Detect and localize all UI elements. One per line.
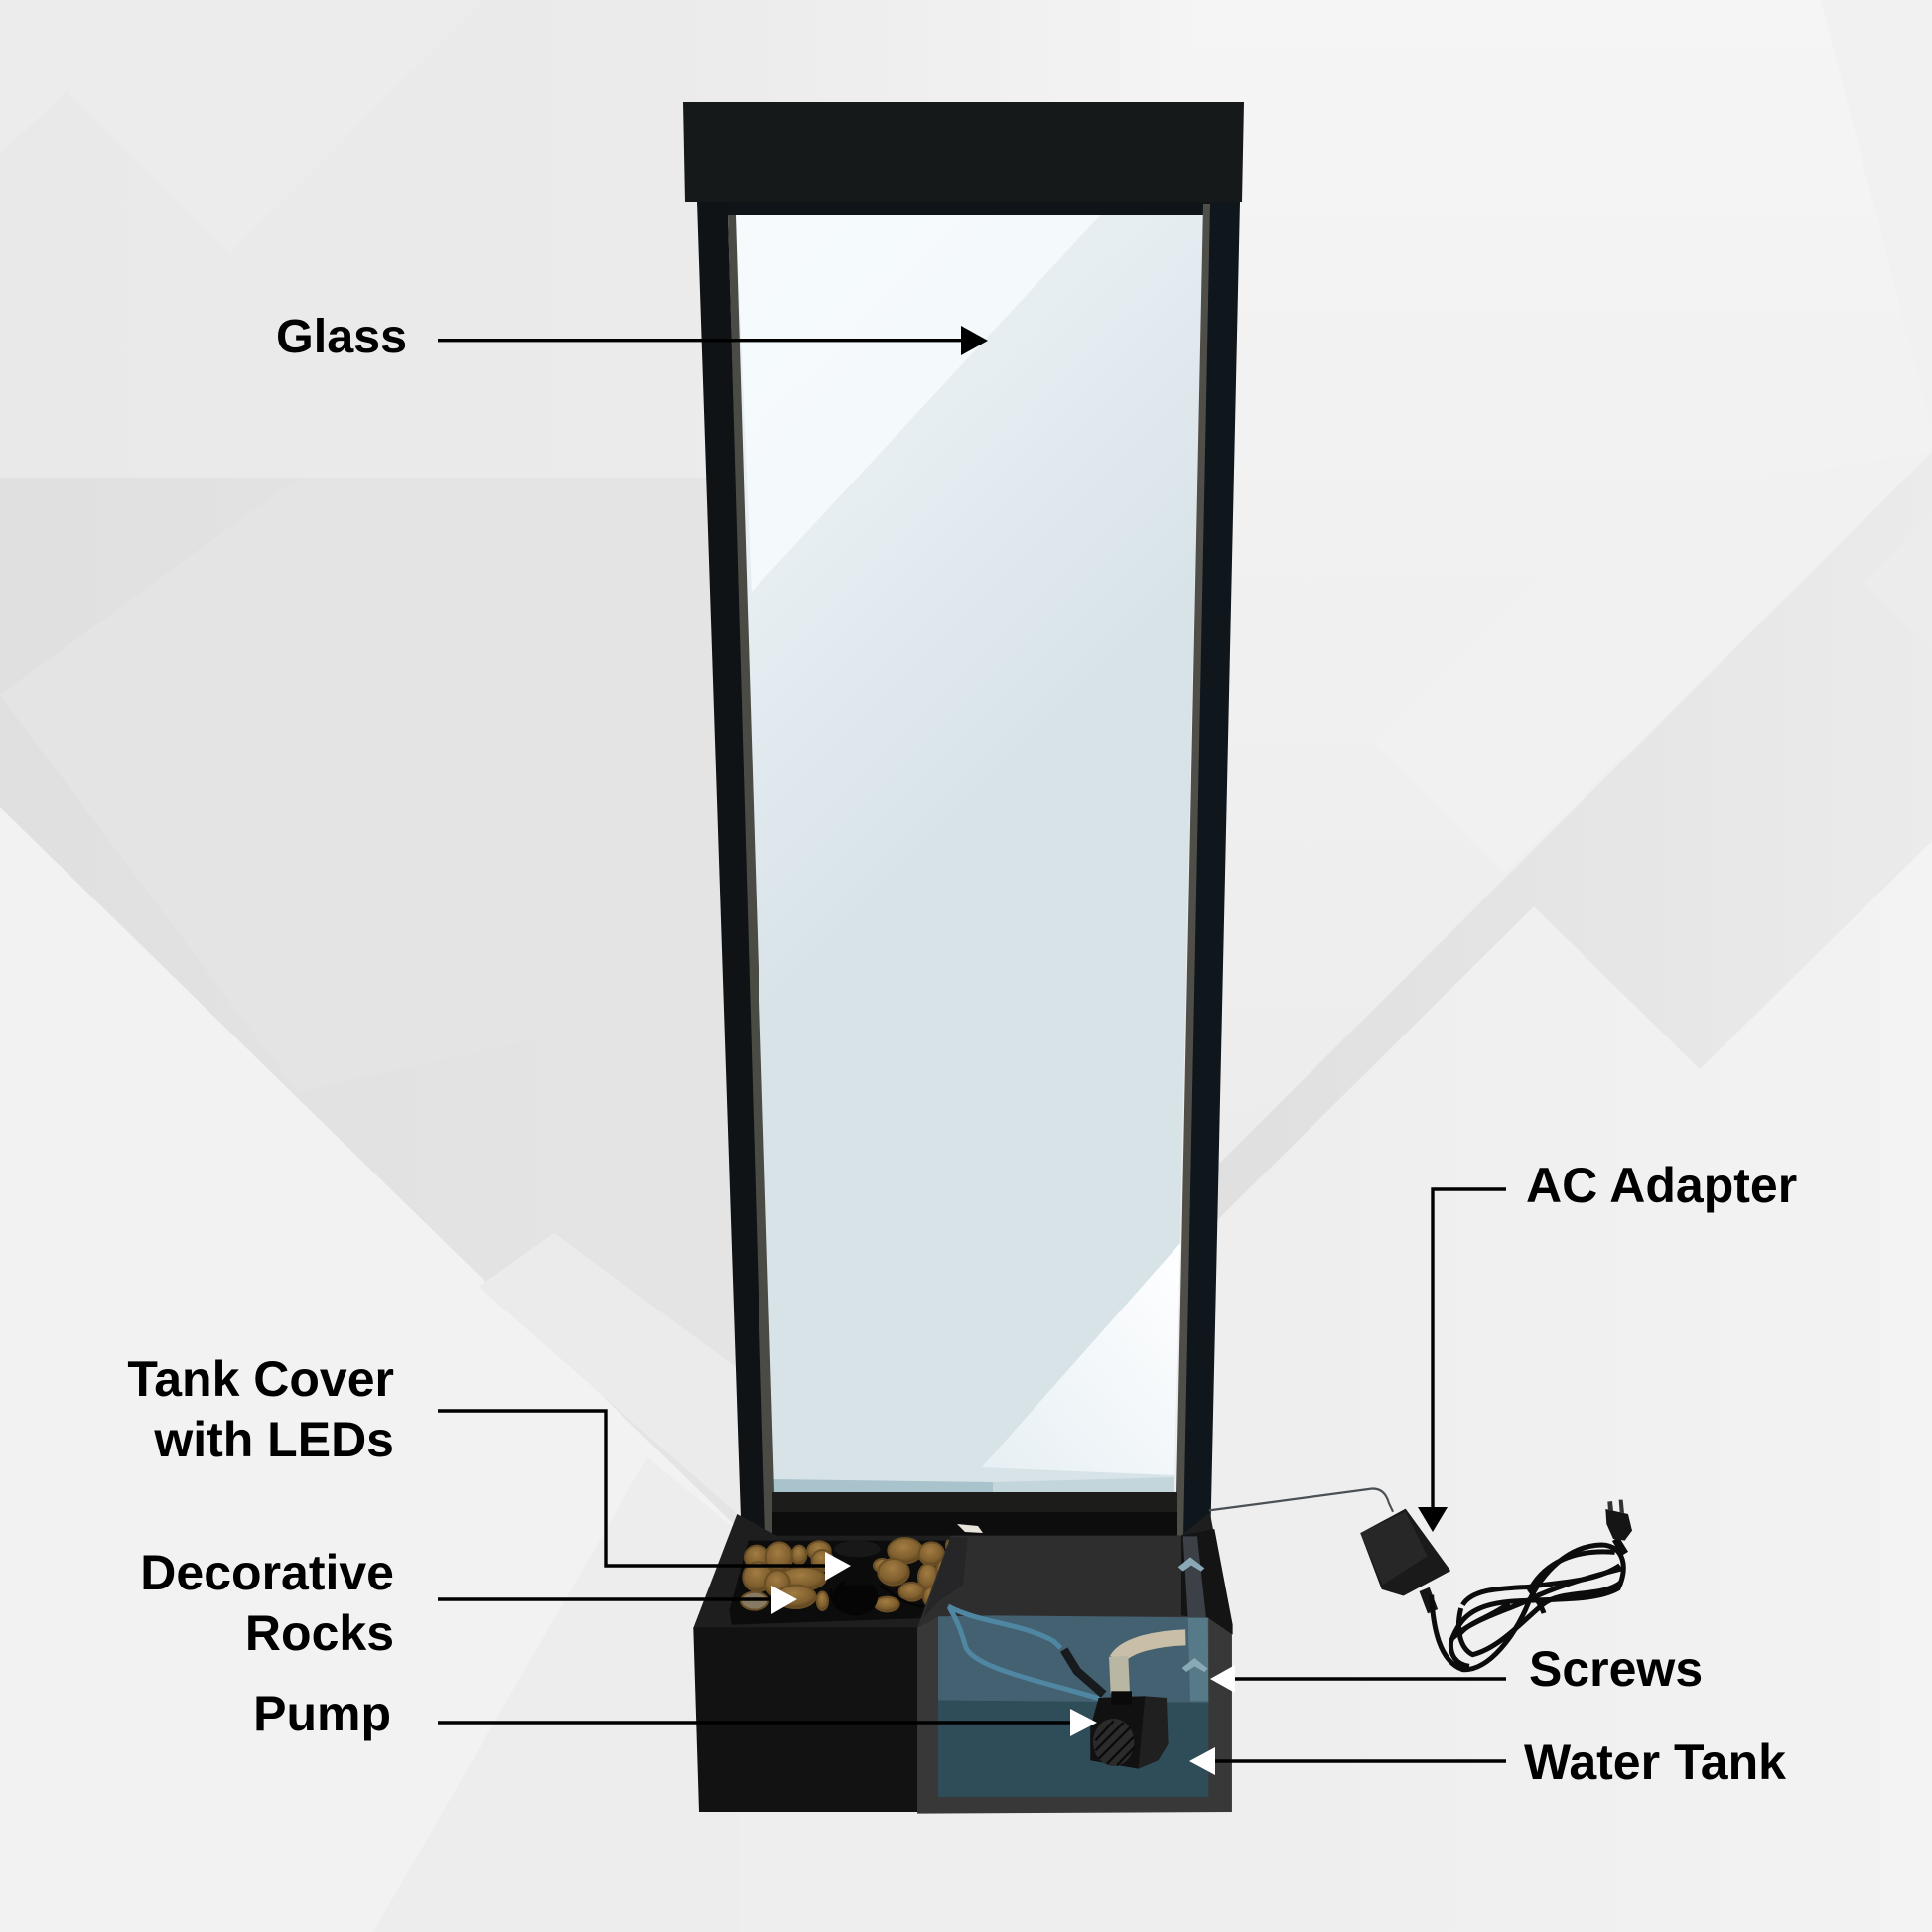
label: Pump: Pump xyxy=(253,1686,391,1741)
glass panel xyxy=(736,215,1203,1492)
right trim xyxy=(1176,204,1210,1537)
arrow: Glass xyxy=(438,326,988,355)
label: AC Adapter: AC Adapter xyxy=(1526,1158,1797,1213)
top cap xyxy=(683,102,1244,202)
label: AC Adapter xyxy=(1418,1158,1797,1532)
arrow: Screws xyxy=(1210,1665,1506,1693)
water tank lower xyxy=(938,1701,1208,1797)
power cord xyxy=(1432,1500,1632,1670)
adapter body xyxy=(1360,1509,1450,1596)
label: Water Tank: Water Tank xyxy=(1524,1734,1786,1790)
decorative rocks xyxy=(741,1538,950,1616)
label: Decorative Rocks: Rocks xyxy=(245,1605,394,1661)
strain relief xyxy=(1425,1589,1433,1611)
adapter face xyxy=(1360,1512,1428,1585)
left base front xyxy=(693,1627,921,1812)
label: Screws xyxy=(1210,1641,1703,1697)
lower back band xyxy=(772,1492,1177,1538)
blue tubes xyxy=(948,1606,1102,1700)
right leg xyxy=(1183,202,1240,1549)
label: Pump xyxy=(253,1686,1097,1741)
plug xyxy=(1605,1500,1632,1541)
pump xyxy=(1090,1691,1169,1769)
label: Decorative Rocks: Decorative xyxy=(140,1545,394,1600)
tank cover panel xyxy=(917,1536,1232,1628)
label: Glass: Glass xyxy=(276,310,407,363)
product: water feature frame xyxy=(683,102,1244,1549)
arrow: Pump xyxy=(438,1709,1097,1736)
tank front frame xyxy=(917,1616,1232,1814)
water tank upper xyxy=(938,1615,1208,1703)
label: Decorative Rocks xyxy=(140,1545,797,1661)
label: Water Tank xyxy=(1189,1734,1786,1790)
wing screws xyxy=(1178,1557,1208,1672)
label: Tank Cover with LEDs xyxy=(127,1351,851,1581)
base with rocks and water tank xyxy=(693,1512,1233,1814)
left leg xyxy=(697,202,766,1549)
arrow: AC Adapter xyxy=(1418,1189,1506,1532)
screw rail top xyxy=(1183,1536,1206,1618)
arrow: Tank Cover xyxy=(438,1411,851,1581)
arrow: Water Tank xyxy=(1189,1747,1506,1775)
tube connector xyxy=(1064,1650,1104,1695)
translucent cover edge xyxy=(923,1537,968,1618)
screw rail in water xyxy=(1188,1618,1208,1701)
label: Tank Cover with LEDs: Tank Cover xyxy=(127,1351,394,1407)
cover right side xyxy=(1181,1529,1233,1635)
pump outlet fitting xyxy=(831,1541,923,1616)
ac adapter and cord xyxy=(1209,1489,1632,1670)
base top surface xyxy=(693,1512,1232,1628)
beige elbow tube xyxy=(1117,1637,1185,1660)
label: Tank Cover with LEDs: with LEDs xyxy=(153,1412,394,1467)
adapter thin wire xyxy=(1209,1489,1393,1512)
left trim xyxy=(728,215,774,1537)
label: Glass xyxy=(276,310,988,363)
label: Screws: Screws xyxy=(1529,1641,1703,1697)
arrow: Decorative Rocks xyxy=(438,1586,797,1614)
top inner shade xyxy=(715,202,1211,215)
white tag xyxy=(957,1524,983,1533)
